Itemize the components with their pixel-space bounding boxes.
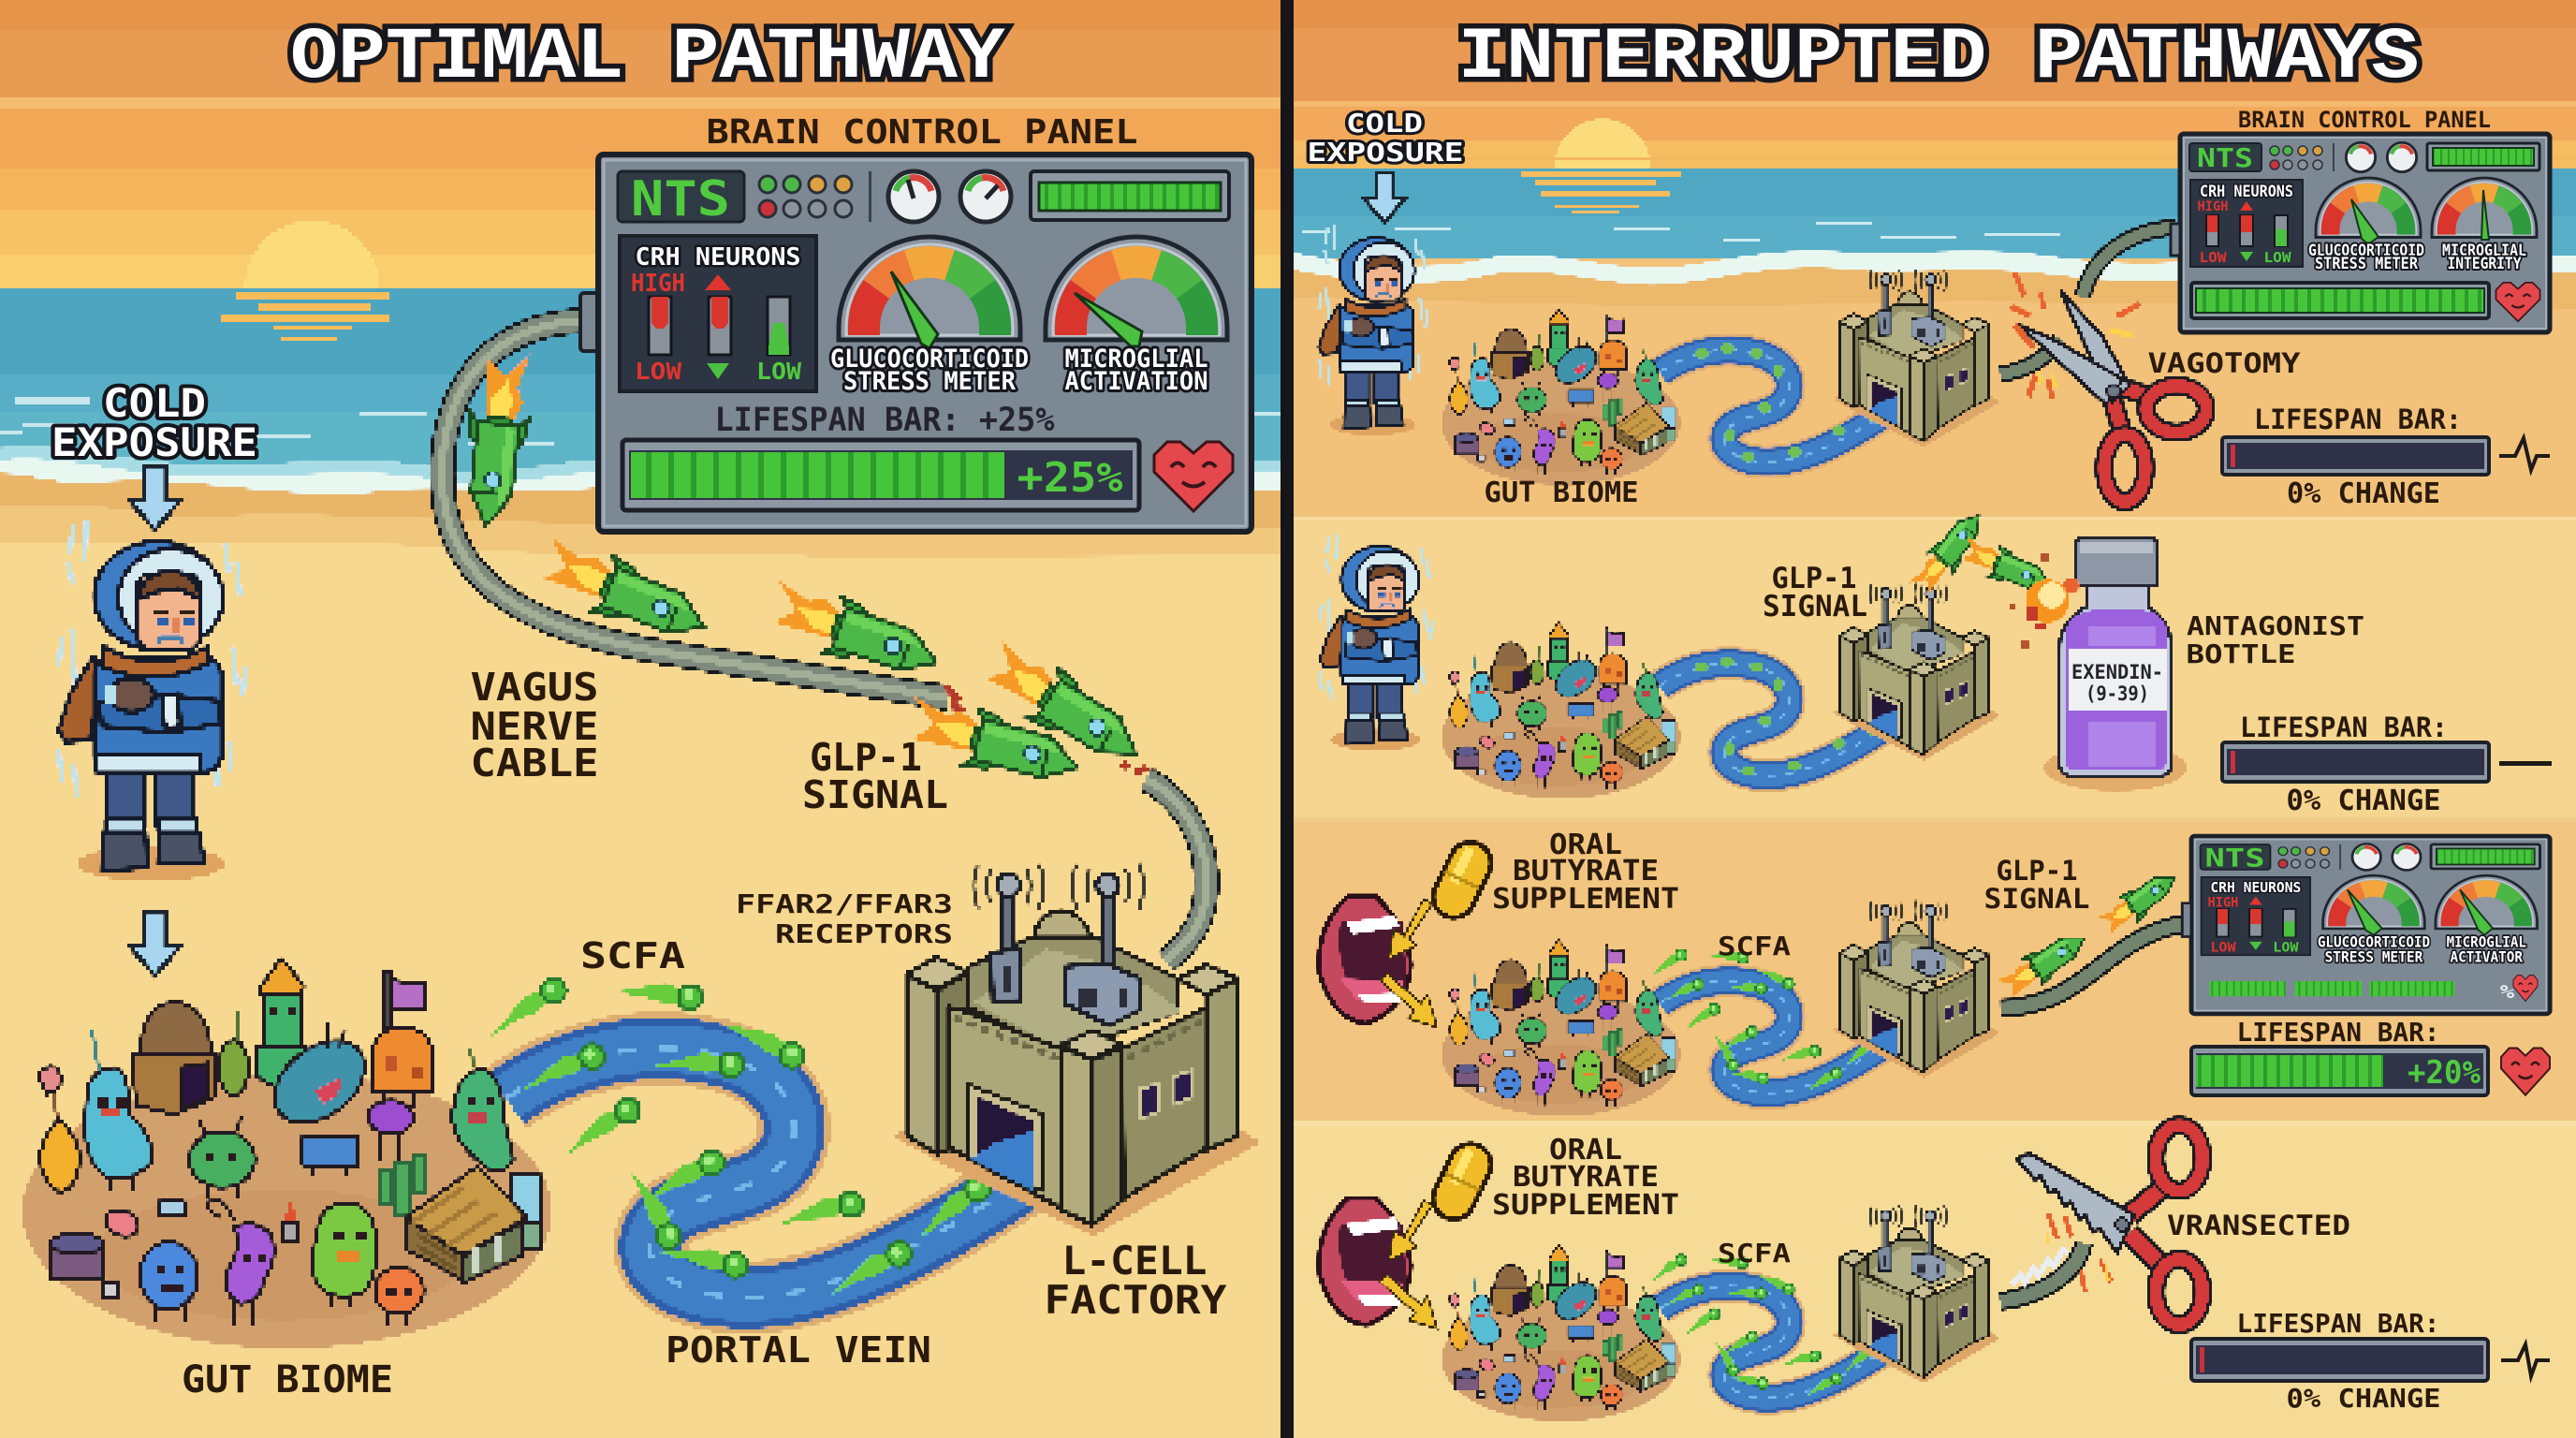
panel: brain control panel (restored): STRESS METER xyxy=(2325,947,2423,965)
CRH neurons switch box: LOW xyxy=(635,358,682,385)
GLP-1 rockets blocked xyxy=(1906,505,2056,601)
icon: scissors vagotomy xyxy=(2020,292,2206,502)
label: FFAR2/FFAR3 receptors: RECEPTORS xyxy=(775,918,953,949)
label: L-cell factory: FACTORY xyxy=(1045,1277,1227,1323)
lifespan bar 0% flat: 0% CHANGE xyxy=(2286,785,2441,817)
label: brain control panel: BRAIN CONTROL PANEL xyxy=(2238,107,2491,133)
icon: scissors transected xyxy=(2017,1125,2203,1325)
gut biome xyxy=(1442,623,1680,799)
lifespan bar 0% flat: LIFESPAN BAR: xyxy=(2240,712,2448,743)
icon: mouth, pill and arrows xyxy=(1319,1137,1498,1328)
lifespan bar 0% flat xyxy=(2222,712,2552,817)
panel: brain control panel (vagotomy) xyxy=(2171,134,2550,332)
label: L-cell factory xyxy=(1045,1238,1227,1323)
factory xyxy=(1834,1206,1999,1383)
GLP-1 rockets xyxy=(1994,864,2183,1005)
label: oral butyrate supplement xyxy=(1492,1134,1679,1222)
gut biome xyxy=(1442,940,1680,1116)
factory xyxy=(1834,901,1999,1078)
severed cable with serrated blade xyxy=(2000,1243,2084,1301)
label: antagonist bottle xyxy=(2187,610,2364,669)
label: vagus nerve cable: VAGUS xyxy=(470,665,599,710)
sparks xyxy=(2046,1212,2114,1293)
icon: cold-exposure person xyxy=(58,520,245,881)
panel: brain control panel (restored): NTS xyxy=(2205,843,2265,873)
panel: brain control panel (restored): % xyxy=(2500,981,2515,1003)
label: oral butyrate supplement: SUPPLEMENT xyxy=(1492,883,1679,916)
panel: brain control panel (vagotomy): LOW xyxy=(2200,249,2228,266)
icon: setting sun xyxy=(244,220,379,355)
label: cold exposure: COLD xyxy=(103,380,206,426)
panel: brain control panel (vagotomy): CRH NEURONS xyxy=(2200,183,2293,201)
panel: optimal pathway xyxy=(0,0,1281,1438)
label: oral butyrate supplement: ORAL xyxy=(1549,829,1622,861)
arrow: cold exposure to person xyxy=(129,467,180,530)
label: FFAR2/FFAR3 receptors: FFAR2/FFAR3 xyxy=(736,888,953,919)
explosion xyxy=(2009,552,2079,649)
label: SCFA: SCFA xyxy=(580,935,685,976)
vagus nerve cable lower segment xyxy=(1121,763,1206,961)
factory xyxy=(1834,583,1999,760)
river xyxy=(1660,1286,1891,1398)
lifespan bar 0%: 0% CHANGE xyxy=(2287,477,2440,510)
icon: antagonist bottle xyxy=(2044,538,2187,791)
icon: smiling heart xyxy=(1154,442,1233,511)
panel: brain control panel (restored): ACTIVATOR xyxy=(2450,947,2524,965)
icon: mouth, pill and arrows xyxy=(1319,836,1498,1027)
CRH neurons switch box: HIGH xyxy=(631,270,685,298)
illustration: portal vein river xyxy=(505,1048,1020,1297)
label: SCFA: SCFA xyxy=(1718,1238,1791,1269)
label: cold exposure: EXPOSURE xyxy=(51,419,257,465)
lifespan bar 0% xyxy=(2222,404,2550,510)
SCFA particles xyxy=(1647,1249,1880,1397)
label: GLP-1 signal: SIGNAL xyxy=(1984,883,2089,915)
SCFA particles xyxy=(1647,944,1880,1092)
panel: brain control panel (restored): LOW xyxy=(2273,939,2298,955)
label: vagus nerve cable xyxy=(470,665,599,785)
label: cold exposure xyxy=(1307,108,1464,168)
vagus nerve cable upper segment xyxy=(442,320,964,712)
label: oral butyrate supplement: BUTYRATE xyxy=(1513,1161,1659,1194)
label: SCFA: SCFA xyxy=(1718,931,1791,961)
row 1: vagotomy xyxy=(1307,107,2550,510)
microglial activation meter xyxy=(1046,237,1227,396)
status lights xyxy=(759,176,852,217)
label: cold exposure: COLD xyxy=(1346,108,1423,139)
label: vagus nerve cable: NERVE xyxy=(470,704,599,749)
icon: smiling heart xyxy=(2501,1049,2550,1095)
label: oral butyrate supplement: BUTYRATE xyxy=(1513,855,1659,888)
title: interrupted pathways: INTERRUPTED PATHWAYS xyxy=(1458,17,2419,99)
panel: interrupted pathways xyxy=(1294,0,2576,1438)
glucocorticoid stress meter: STRESS METER xyxy=(843,367,1017,396)
panel: brain control panel (restored): HIGH xyxy=(2207,894,2238,910)
lifespan bar +20% xyxy=(2191,1017,2550,1095)
illustration: gut biome colony xyxy=(22,958,551,1348)
illustration: L-cell factory with receptor antennas xyxy=(892,863,1261,1236)
label: cold exposure: EXPOSURE xyxy=(1307,137,1464,168)
factory xyxy=(1834,270,1999,447)
center divider xyxy=(1281,0,1294,1438)
river xyxy=(1660,981,1891,1093)
severed vagus cable xyxy=(2000,227,2176,374)
arrow: cold to person xyxy=(1364,172,1405,223)
vagus cable xyxy=(2000,924,2184,1008)
NTS indicator: NTS xyxy=(631,171,730,227)
panel: brain control panel (restored): MICROGLIAL xyxy=(2447,932,2526,950)
label: GLP-1 signal xyxy=(1763,562,1867,624)
NTS indicator xyxy=(618,171,744,227)
row 2 illustrations xyxy=(1320,505,2187,799)
icon: person xyxy=(1319,226,1427,435)
bottle label text: EXENDIN- xyxy=(2071,661,2163,683)
label: GLP-1 signal: GLP-1 xyxy=(1996,855,2078,887)
panel: brain control panel dashboard xyxy=(580,154,1251,532)
label: GLP-1 signal: GLP-1 xyxy=(1771,562,1857,595)
lifespan bar 0%: 0% CHANGE xyxy=(2286,1383,2441,1414)
label: oral butyrate supplement: SUPPLEMENT xyxy=(1492,1189,1679,1222)
lifespan bar +25%: +25% xyxy=(1017,454,1123,502)
small dials xyxy=(888,171,1011,222)
icon: person xyxy=(1320,534,1432,751)
lifespan bar label: LIFESPAN BAR: +25% xyxy=(715,402,1054,439)
label: GLP-1 signal xyxy=(1984,855,2089,915)
label: FFAR2/FFAR3 receptors xyxy=(736,888,953,949)
CRH neurons switch box: CRH NEURONS xyxy=(635,243,801,271)
microglial activation meter: ACTIVATION xyxy=(1065,367,1208,396)
lifespan bar 0%: LIFESPAN BAR: xyxy=(2237,1308,2439,1339)
lifespan bar +20%: LIFESPAN BAR: xyxy=(2237,1017,2439,1048)
lifespan bar +25% xyxy=(622,440,1139,510)
label: gut biome: GUT BIOME xyxy=(182,1358,393,1401)
lifespan bar 0% xyxy=(2191,1308,2550,1414)
panel: brain control panel (vagotomy): INTEGRITY xyxy=(2447,255,2522,273)
background: right beach and row bands xyxy=(1294,0,2576,1438)
CRH neurons switch box xyxy=(620,236,816,391)
arrow: person to gut biome xyxy=(129,913,180,976)
row 4: transected nerve xyxy=(1319,1125,2550,1421)
river xyxy=(1660,350,1891,462)
label: oral butyrate supplement xyxy=(1492,829,1679,916)
panel: brain control panel (vagotomy): HIGH xyxy=(2198,199,2228,214)
title: optimal pathway: OPTIMAL PATHWAY xyxy=(290,17,1005,99)
illustration: SCFA particles xyxy=(478,965,995,1294)
glucocorticoid stress meter xyxy=(830,237,1029,396)
bottle label text xyxy=(2071,661,2163,705)
bottle label text: (9-39) xyxy=(2086,682,2149,705)
lifespan bar +20%: +20% xyxy=(2408,1054,2481,1092)
label: antagonist bottle: ANTAGONIST xyxy=(2187,610,2364,641)
label: transected: VRANSECTED xyxy=(2167,1210,2350,1241)
panel: brain control panel (vagotomy): LOW xyxy=(2263,249,2292,266)
glucocorticoid stress meter: GLUCOCORTICOID xyxy=(830,345,1029,374)
gut biome xyxy=(1442,1245,1680,1421)
river xyxy=(1660,664,1891,775)
row 1 illustrations xyxy=(1319,172,2206,502)
label: L-cell factory: L-CELL xyxy=(1061,1238,1208,1284)
dull SCFA patches xyxy=(1695,344,1881,462)
panel: brain control panel (restored): GLUCOCORTICOID xyxy=(2318,932,2430,950)
label: cold exposure xyxy=(51,380,257,465)
dull SCFA patches xyxy=(1695,657,1881,776)
label: portal vein: PORTAL VEIN xyxy=(666,1329,931,1371)
label: vagotomy: VAGOTOMY xyxy=(2147,347,2301,379)
panel: brain control panel (vagotomy): GLUCOCORTICOID xyxy=(2308,242,2424,260)
gut biome xyxy=(1442,309,1680,485)
GLP-1 signal rockets xyxy=(458,347,1152,794)
row 4 illustrations xyxy=(1319,1125,2203,1421)
panel: brain control panel (vagotomy): STRESS METER xyxy=(2315,255,2419,273)
top status bar xyxy=(1031,171,1229,220)
row 2: antagonist bottle xyxy=(1320,505,2552,817)
sparks xyxy=(2009,271,2141,400)
panel: brain control panel (restored): LOW xyxy=(2210,939,2236,955)
label: GLP-1 signal: SIGNAL xyxy=(802,772,948,817)
label: GLP-1 signal: GLP-1 xyxy=(810,735,922,780)
lifespan bar 0%: LIFESPAN BAR: xyxy=(2254,404,2462,435)
beach sunset background and illustrated left scene xyxy=(0,0,1281,1438)
panel: brain control panel (vagotomy): MICROGLIAL xyxy=(2442,242,2526,260)
panel: brain control panel (restored) xyxy=(2182,836,2550,1014)
label: gut biome: GUT BIOME xyxy=(1485,477,1638,509)
panel: brain control panel (vagotomy): NTS xyxy=(2197,142,2253,173)
microglial activation meter: MICROGLIAL xyxy=(1065,345,1208,374)
label: brain control panel: BRAIN CONTROL PANEL xyxy=(706,113,1138,152)
CRH neurons switch box: LOW xyxy=(756,358,802,385)
label: GLP-1 signal xyxy=(802,735,948,817)
label: GLP-1 signal: SIGNAL xyxy=(1763,590,1867,624)
row 3: oral butyrate supplement xyxy=(1319,829,2550,1116)
panel: brain control panel (restored): CRH NEURONS xyxy=(2210,879,2301,896)
label: oral butyrate supplement: ORAL xyxy=(1549,1134,1622,1167)
label: antagonist bottle: BOTTLE xyxy=(2187,638,2295,669)
label: vagus nerve cable: CABLE xyxy=(470,741,599,785)
row 3 illustrations xyxy=(1319,836,2184,1116)
